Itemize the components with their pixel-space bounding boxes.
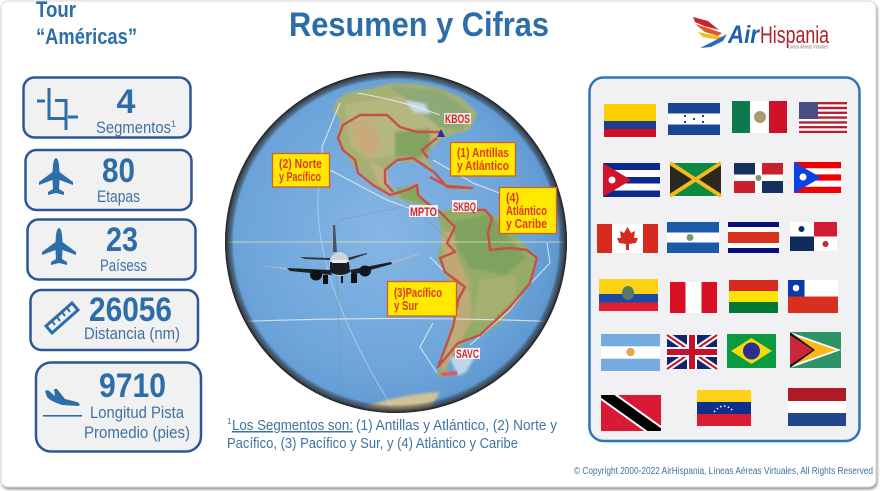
airport label: SAVC: SAVC bbox=[456, 347, 479, 361]
stat: segmentos: 4 bbox=[117, 83, 136, 121]
flag: Jamaica bbox=[670, 163, 721, 196]
flag: Argentina bbox=[601, 334, 660, 371]
callout: segment 3: (3)Pacífico bbox=[394, 286, 442, 300]
heading: tour name: “Américas” bbox=[36, 24, 137, 49]
stat: etapas: 80 bbox=[102, 152, 135, 190]
stat: longitud pista: Promedio (pies) bbox=[84, 423, 190, 442]
stat: longitud pista: 9710 bbox=[99, 367, 166, 405]
airplane photo bbox=[257, 225, 421, 284]
stat: distancia: Distancia (nm) bbox=[84, 324, 180, 343]
callout: segment 4: Atlántico bbox=[506, 204, 547, 218]
airport label: SKBQ: SKBQ bbox=[453, 200, 476, 214]
footnote: 1 bbox=[227, 417, 232, 426]
flag: El Salvador bbox=[667, 222, 719, 253]
flag: Puerto Rico bbox=[794, 162, 841, 193]
footnote: (1) Antillas y Atlántico, (2) Norte y bbox=[356, 417, 557, 434]
land: antarctica bbox=[364, 390, 441, 412]
flag: Dominican Republic bbox=[734, 163, 783, 193]
callout: segment 3 bbox=[388, 282, 456, 316]
graticule bbox=[226, 93, 566, 412]
heading: tour name bbox=[36, 0, 137, 49]
icon: logo wing bbox=[693, 17, 727, 48]
flag: Trinidad and Tobago bbox=[601, 393, 661, 433]
callout: segment 2: (2) Norte bbox=[279, 157, 322, 171]
panel: flags bbox=[590, 78, 860, 441]
airport label: SKBQ bbox=[452, 200, 477, 214]
footnote: Pacífico, (3) Pacífico y Sur, y (4) Atlántico y Caribe bbox=[227, 435, 518, 452]
stat: longitud pista bbox=[36, 362, 201, 452]
icon: plane landing bbox=[43, 389, 82, 417]
globe rim bbox=[225, 71, 567, 413]
route line bbox=[338, 115, 537, 367]
footnote bbox=[227, 417, 557, 452]
callout: segment 1 bbox=[450, 142, 516, 176]
callout: segment 4 bbox=[500, 188, 556, 234]
callout: segment 1: (1) Antillas bbox=[457, 146, 509, 160]
airport label: MPTO: MPTO bbox=[410, 205, 437, 219]
icon: crop segments bbox=[37, 88, 78, 130]
stat: segmentos: 1 bbox=[171, 119, 176, 129]
stat: paises: Paísess bbox=[100, 256, 147, 275]
stat: distancia: 26056 bbox=[89, 291, 172, 329]
icon: airplane bbox=[42, 228, 76, 265]
land: south america bbox=[437, 207, 537, 377]
flag: Venezuela bbox=[697, 390, 751, 426]
stat: longitud pista: Longitud Pista bbox=[90, 403, 184, 422]
callout: segment 3: y Sur bbox=[394, 299, 418, 313]
flag: Canada bbox=[597, 224, 658, 253]
land: north america bbox=[333, 83, 477, 213]
callout: segment 4: (4) bbox=[506, 191, 519, 205]
patch: pink area bbox=[440, 371, 457, 376]
logo: AirHispania: Hispania bbox=[760, 22, 829, 49]
flag: Guyana bbox=[790, 332, 841, 368]
flag: Ecuador bbox=[599, 279, 658, 311]
callout: segment 4: y Caribe bbox=[506, 217, 547, 231]
logo: AirHispania: Líneas Aéreas Virtuales bbox=[788, 44, 828, 50]
flag: United Kingdom bbox=[667, 335, 717, 369]
callout: segment 2: y Pacífico bbox=[279, 170, 321, 184]
flag: Netherlands bbox=[788, 388, 846, 426]
stat: distancia bbox=[30, 290, 198, 350]
globe map bbox=[225, 71, 567, 420]
logo: AirHispania: Air bbox=[727, 21, 760, 49]
flag: Mexico bbox=[732, 101, 787, 133]
flag: Bolivia bbox=[729, 280, 778, 313]
flag: Panama bbox=[790, 222, 837, 251]
flag: Chile bbox=[788, 280, 838, 313]
flag: Cuba bbox=[603, 163, 660, 197]
stat: segmentos bbox=[24, 78, 190, 138]
stat: paises bbox=[28, 220, 196, 280]
footnote: Los Segmentos son: bbox=[232, 417, 353, 434]
callout: segment 2 bbox=[272, 154, 330, 187]
title: Resumen y Cifras bbox=[289, 6, 549, 44]
stat: etapas bbox=[26, 150, 192, 210]
flag: Brazil bbox=[727, 334, 776, 368]
stat: etapas: Etapas bbox=[97, 187, 140, 206]
logo: AirHispania bbox=[693, 17, 829, 50]
patch: pale shelf near SAVC bbox=[450, 348, 480, 376]
flag: Honduras bbox=[668, 103, 720, 135]
icon: airplane bbox=[39, 158, 73, 195]
callout: segment 1: y Atlántico bbox=[457, 159, 509, 173]
airport label: KBOS: KBOS bbox=[445, 112, 470, 126]
stat: segmentos: Segmentos bbox=[96, 118, 171, 137]
flag: Peru bbox=[670, 282, 717, 313]
point: KBOS marker bbox=[437, 129, 445, 137]
flag: Costa Rica bbox=[728, 222, 779, 253]
icon: ruler bbox=[46, 303, 78, 333]
stat: paises: 23 bbox=[106, 221, 138, 259]
flag: USA bbox=[799, 102, 847, 133]
flag: Colombia bbox=[604, 104, 656, 137]
